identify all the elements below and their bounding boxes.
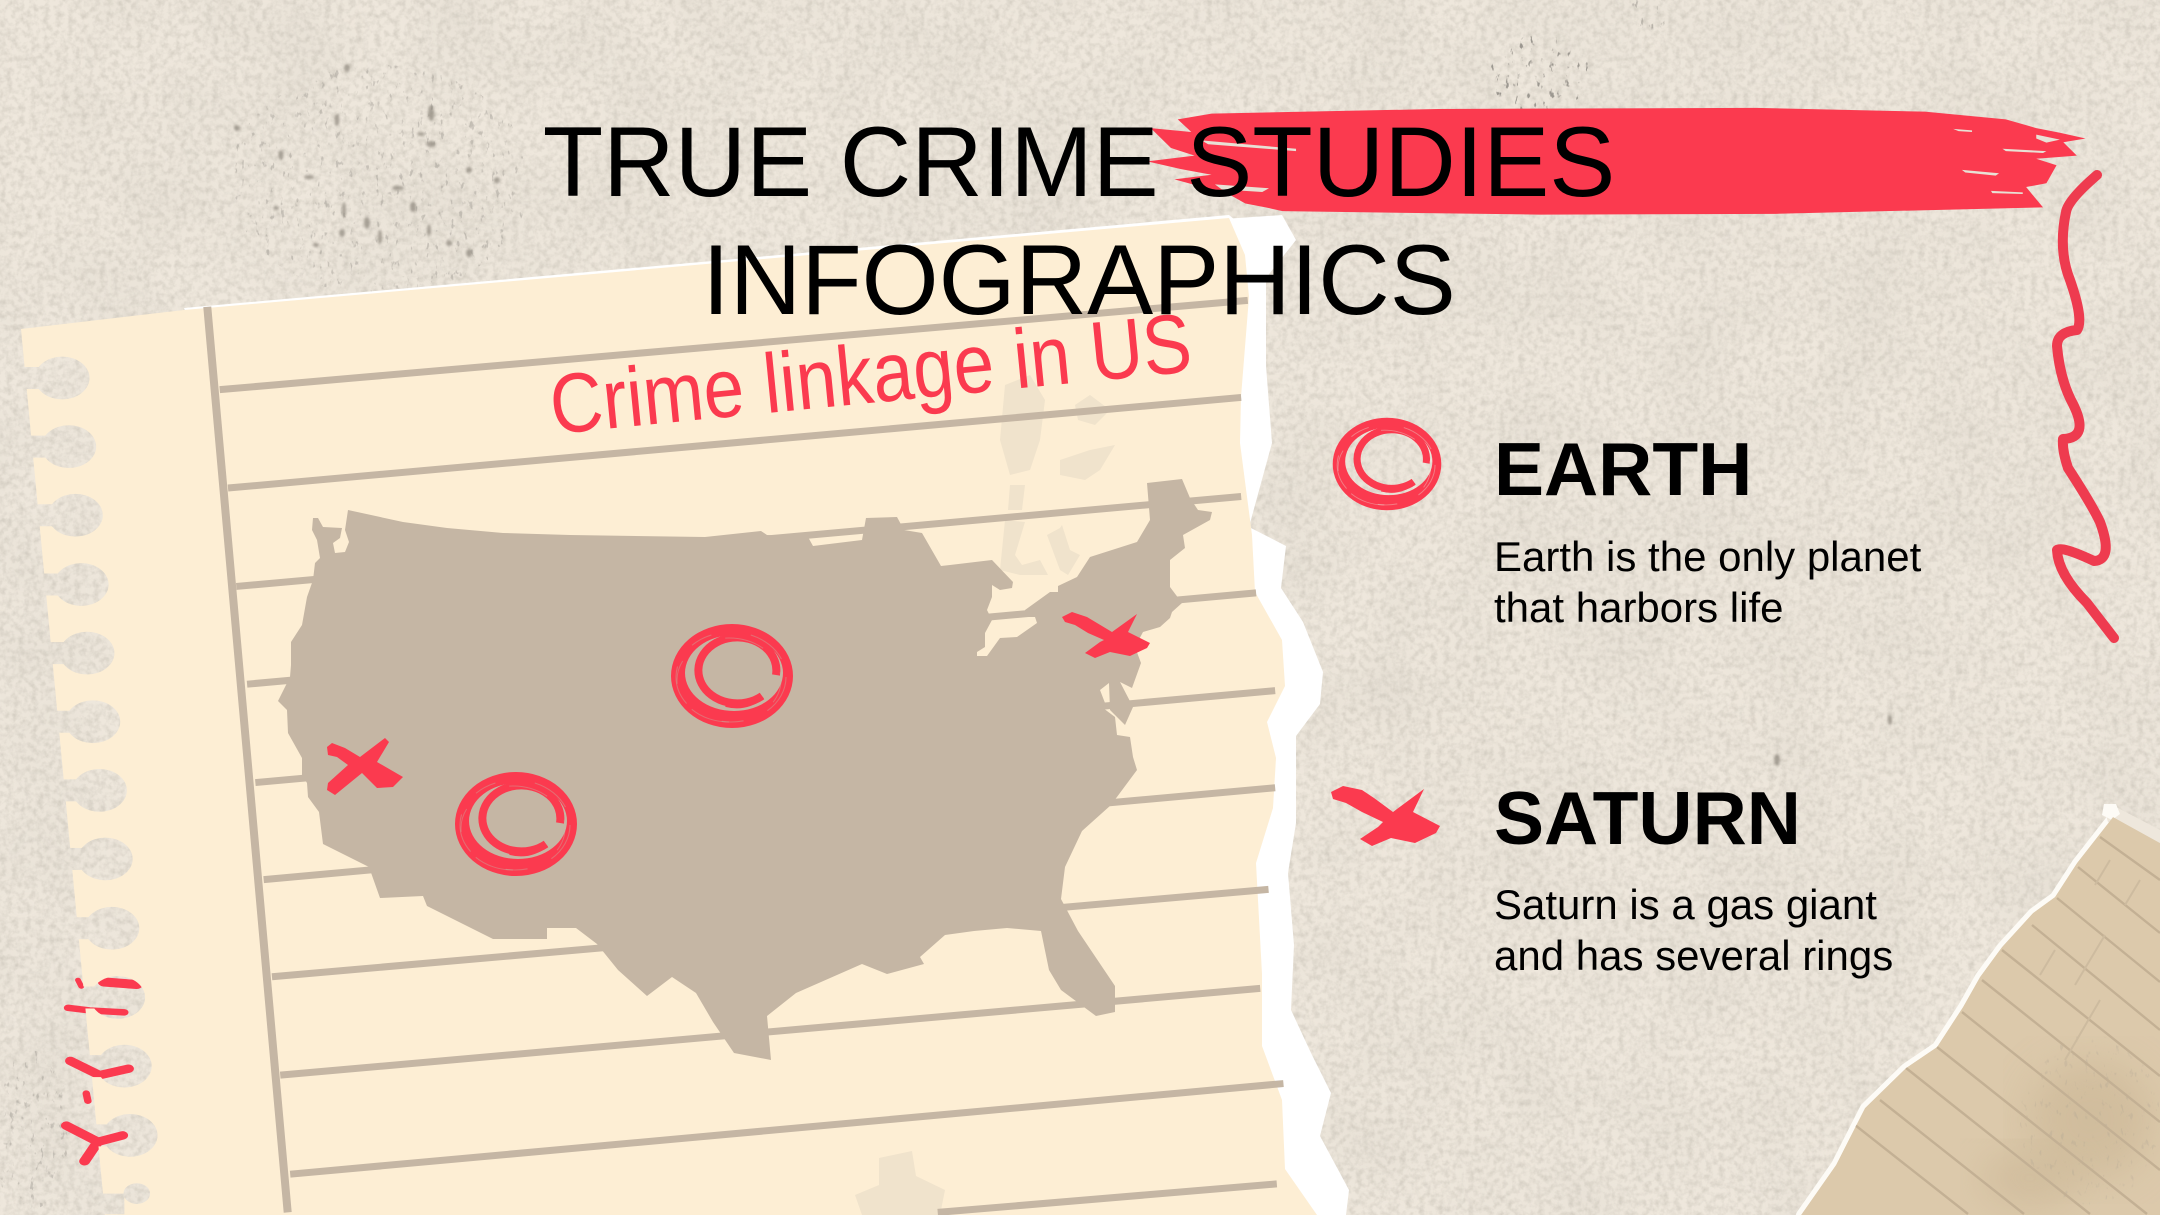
red scribbles behind notebook holes: [66, 980, 137, 1161]
icon: scribbled cross: [1331, 786, 1440, 846]
legend: earth: [1333, 418, 1922, 631]
faint stains on paper: [855, 375, 1115, 1215]
title: INFOGRAPHICS: [702, 224, 1456, 335]
torn paper: bottom right corner: [1801, 804, 2160, 1215]
map heading: Crime linkage in US: [546, 296, 1196, 452]
map marker: cross west: [327, 738, 403, 795]
map marker: circle north: [671, 624, 793, 728]
red brush stroke behind title: [1147, 108, 2086, 215]
cream paper sheet with punched holes: [21, 218, 1317, 1215]
notebook ruled lines and margin: [207, 300, 1283, 1212]
earth description: that harbors life: [1494, 584, 1784, 631]
red squiggle right: [2057, 175, 2114, 638]
map of the United States: [278, 479, 1212, 1060]
map marker: circle south: [455, 772, 577, 876]
legend: saturn: [1331, 776, 1893, 979]
torn white edge of the notebook paper: [1180, 215, 1349, 1215]
map marker: cross east: [1062, 612, 1150, 658]
earth heading: EARTH: [1494, 427, 1752, 511]
notebook paper panel: [21, 215, 1349, 1215]
title: TRUE CRIME STUDIES: [543, 106, 1615, 217]
white top edge line: [184, 215, 1235, 313]
icon: scribbled circle: [1333, 418, 1441, 510]
saturn heading: SATURN: [1494, 776, 1801, 860]
saturn description: and has several rings: [1494, 932, 1893, 979]
saturn description: Saturn is a gas giant: [1494, 881, 1877, 928]
earth description: Earth is the only planet: [1494, 533, 1922, 580]
title: [543, 106, 1615, 335]
